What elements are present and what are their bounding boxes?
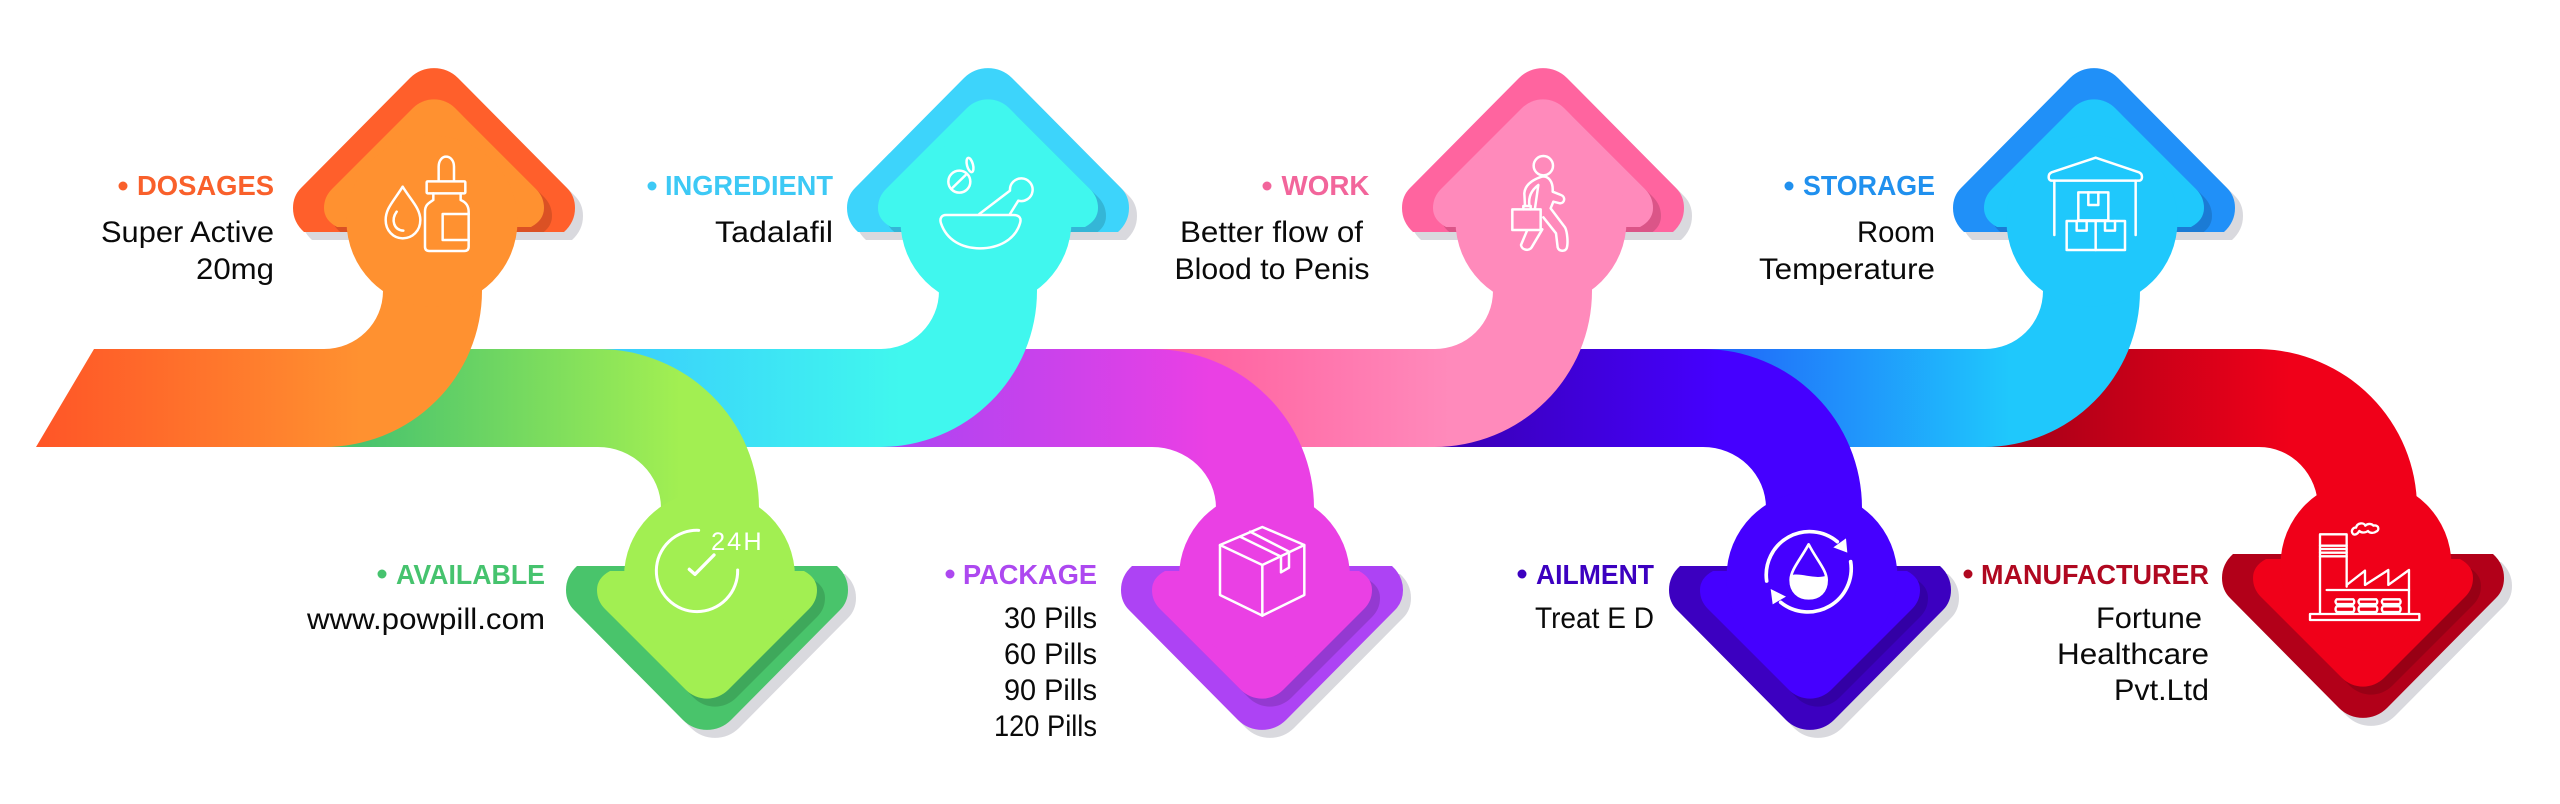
text: ingredient <box>648 170 833 249</box>
ribbon: storage <box>1703 280 2140 447</box>
text: ingredient: Tadalafil <box>715 216 833 249</box>
ribbon: available <box>324 349 759 520</box>
text: work: WORK <box>1282 170 1370 201</box>
text: ailment: Treat E D <box>1535 602 1654 635</box>
text: available: AVAILABLE <box>396 559 545 590</box>
ribbon: work <box>1152 280 1592 447</box>
step 2: available ribbon and arrow <box>324 349 856 738</box>
ribbon: dosages <box>36 280 482 447</box>
text: available <box>306 559 545 636</box>
arrow head: ingredient <box>847 68 1137 306</box>
text: work <box>1174 170 1370 286</box>
arrow head: manufacturer <box>2222 480 2512 726</box>
ribbon: package <box>880 349 1314 520</box>
ribbon: manufacturer <box>1984 349 2417 520</box>
ribbon: ailment <box>1434 349 1862 520</box>
text: package <box>946 559 1097 743</box>
icon: warehouse <box>2049 158 2142 250</box>
step 6: ailment ribbon and arrow <box>1434 349 1959 738</box>
text: ailment: AILMENT <box>1536 559 1654 590</box>
text: storage: STORAGE <box>1803 170 1935 201</box>
text: manufacturer: Pvt.Ltd <box>2114 674 2209 707</box>
text: available: www.powpill.com <box>306 603 545 636</box>
step 1: dosages ribbon and arrow <box>36 68 583 447</box>
text: ingredient: INGREDIENT <box>665 170 833 201</box>
text: work: Blood to Penis <box>1174 253 1370 286</box>
text: package: 30 Pills <box>1004 602 1097 635</box>
step 4: package ribbon and arrow <box>880 349 1411 738</box>
icon: water cycle <box>1766 532 1851 612</box>
step 8: manufacturer ribbon and arrow <box>1984 349 2512 726</box>
icon: factory <box>2310 523 2419 620</box>
text: ailment <box>1518 559 1654 635</box>
arrow head: storage <box>1953 68 2243 306</box>
text: storage: Room <box>1857 216 1935 249</box>
arrow head: package <box>1121 492 1411 738</box>
text: package: 90 Pills <box>1004 674 1097 707</box>
text: storage: Temperature <box>1759 253 1935 286</box>
icon: dropper bottle and drop <box>386 157 469 251</box>
ribbon: ingredient <box>598 280 1037 447</box>
text: storage <box>1759 170 1935 286</box>
text: manufacturer: Fortune <box>2096 602 2202 635</box>
icon: 24 hours clock: 24H <box>711 528 762 556</box>
step 5: work ribbon and arrow <box>1152 68 1692 447</box>
icon: mortar and pestle <box>940 157 1033 248</box>
icon: box <box>1220 527 1304 616</box>
text: work: Better flow of <box>1180 216 1364 249</box>
text: dosages: DOSAGES <box>137 170 274 201</box>
icon: 24 hours clock <box>656 528 762 612</box>
text: package: 60 Pills <box>1004 638 1097 671</box>
text: dosages: 20mg <box>196 253 274 286</box>
arrow head: available <box>566 492 856 738</box>
arrow head: dosages <box>293 68 583 306</box>
step 3: ingredient ribbon and arrow <box>598 68 1137 447</box>
arrow head: ailment <box>1669 492 1959 738</box>
text: manufacturer: Healthcare <box>2057 638 2209 671</box>
step 7: storage ribbon and arrow <box>1703 68 2243 447</box>
icon: walking person <box>1512 156 1567 251</box>
text: package: PACKAGE <box>963 559 1097 590</box>
text: package: 120 Pills <box>994 710 1097 743</box>
text: manufacturer <box>1964 559 2209 707</box>
text: manufacturer: MANUFACTURER <box>1981 559 2209 590</box>
text: dosages <box>101 170 274 286</box>
arrow head: work <box>1402 68 1692 306</box>
text: dosages: Super Active <box>101 216 274 249</box>
